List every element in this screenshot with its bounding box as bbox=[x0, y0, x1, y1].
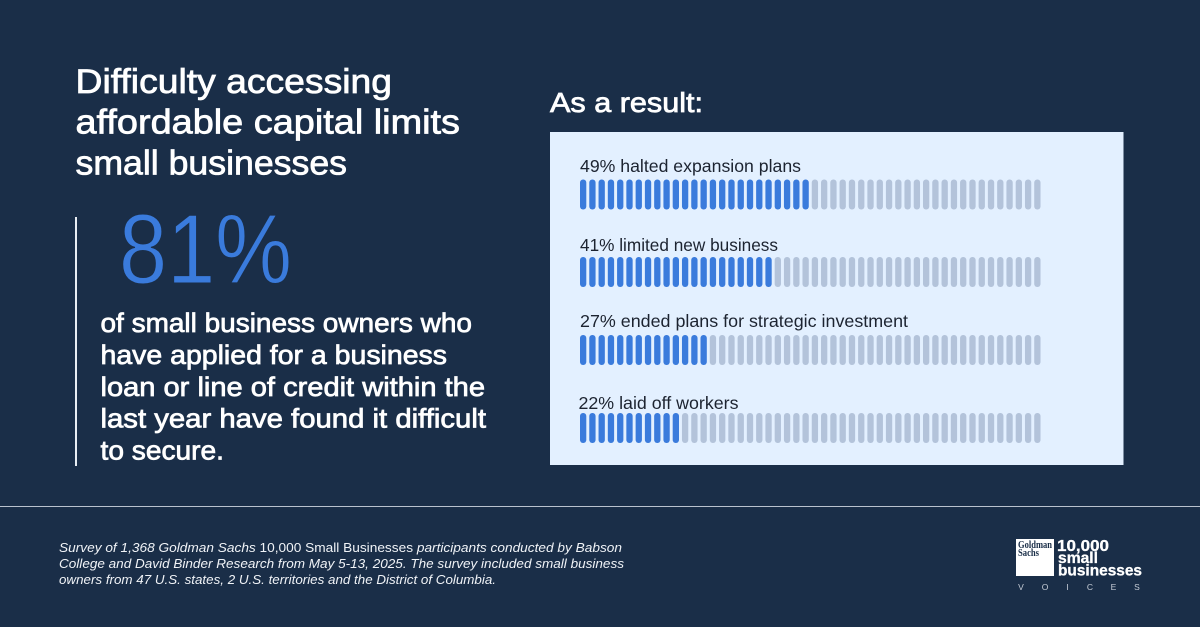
logo: Goldman Sachs 10,000 small businesses voices: 10,000 bbox=[1057, 538, 1109, 555]
vertical accent rule bbox=[75, 217, 77, 466]
heading: as a result: As a result: bbox=[550, 87, 703, 118]
logo: Goldman Sachs 10,000 small businesses voices: small bbox=[1058, 550, 1098, 567]
bar row: halted expansion plans bbox=[580, 156, 1041, 210]
statistic description: loan or line of credit within the bbox=[100, 372, 485, 402]
statistic description: to secure. bbox=[100, 436, 224, 466]
bar row: ended plans for strategic investment: 27% ended plans for strategic investment bbox=[580, 311, 908, 331]
bar row: ended plans for strategic investment bbox=[580, 311, 1041, 365]
bar row: limited new business bbox=[580, 235, 1041, 287]
footnote: Survey of 1,368 Goldman Sachs 10,000 Small Businesses participants conducted by Babson bbox=[59, 540, 622, 555]
logo: Goldman Sachs 10,000 small businesses voices: Goldman bbox=[1018, 540, 1052, 551]
bar row: limited new business: 41% limited new business bbox=[580, 235, 778, 255]
panel: results bbox=[550, 132, 1124, 465]
title: Difficulty accessing bbox=[76, 63, 392, 101]
logo: Goldman Sachs 10,000 small businesses voices: O bbox=[1042, 582, 1049, 592]
logo: Goldman Sachs 10,000 small businesses voices: S bbox=[1134, 582, 1140, 592]
logo: Goldman Sachs 10,000 small businesses voices: I bbox=[1066, 582, 1069, 592]
logo: Goldman Sachs 10,000 small businesses voices: E bbox=[1111, 582, 1117, 592]
logo: Goldman Sachs 10,000 small businesses voices: businesses bbox=[1058, 562, 1142, 580]
logo: Goldman Sachs 10,000 small businesses voices: Sachs bbox=[1018, 548, 1039, 559]
footnote: College and David Binder Research from May 5-13, 2025. The survey included small business bbox=[59, 556, 625, 571]
statistic description: last year have found it difficult bbox=[100, 404, 487, 434]
footnote bbox=[59, 540, 625, 587]
big statistic: 81%: 81% bbox=[119, 194, 292, 304]
bar row: laid off workers: 22% laid off workers bbox=[578, 393, 739, 413]
bar row: halted expansion plans: 49% halted expansion plans bbox=[580, 156, 801, 176]
statistic description bbox=[100, 308, 487, 466]
logo: Goldman Sachs 10,000 small businesses voices: V bbox=[1018, 582, 1024, 592]
title bbox=[76, 63, 460, 182]
logo: Goldman Sachs 10,000 small businesses voices: C bbox=[1087, 582, 1093, 592]
bar row: laid off workers bbox=[578, 393, 1041, 443]
statistic description: of small business owners who bbox=[100, 308, 472, 338]
logo: Goldman Sachs 10,000 small businesses voices bbox=[1016, 538, 1142, 592]
statistic description: have applied for a business bbox=[100, 340, 447, 370]
title: small businesses bbox=[76, 144, 347, 182]
title: affordable capital limits bbox=[76, 104, 460, 142]
footnote: owners from 47 U.S. states, 2 U.S. territories and the District of Columbia. bbox=[59, 572, 496, 587]
